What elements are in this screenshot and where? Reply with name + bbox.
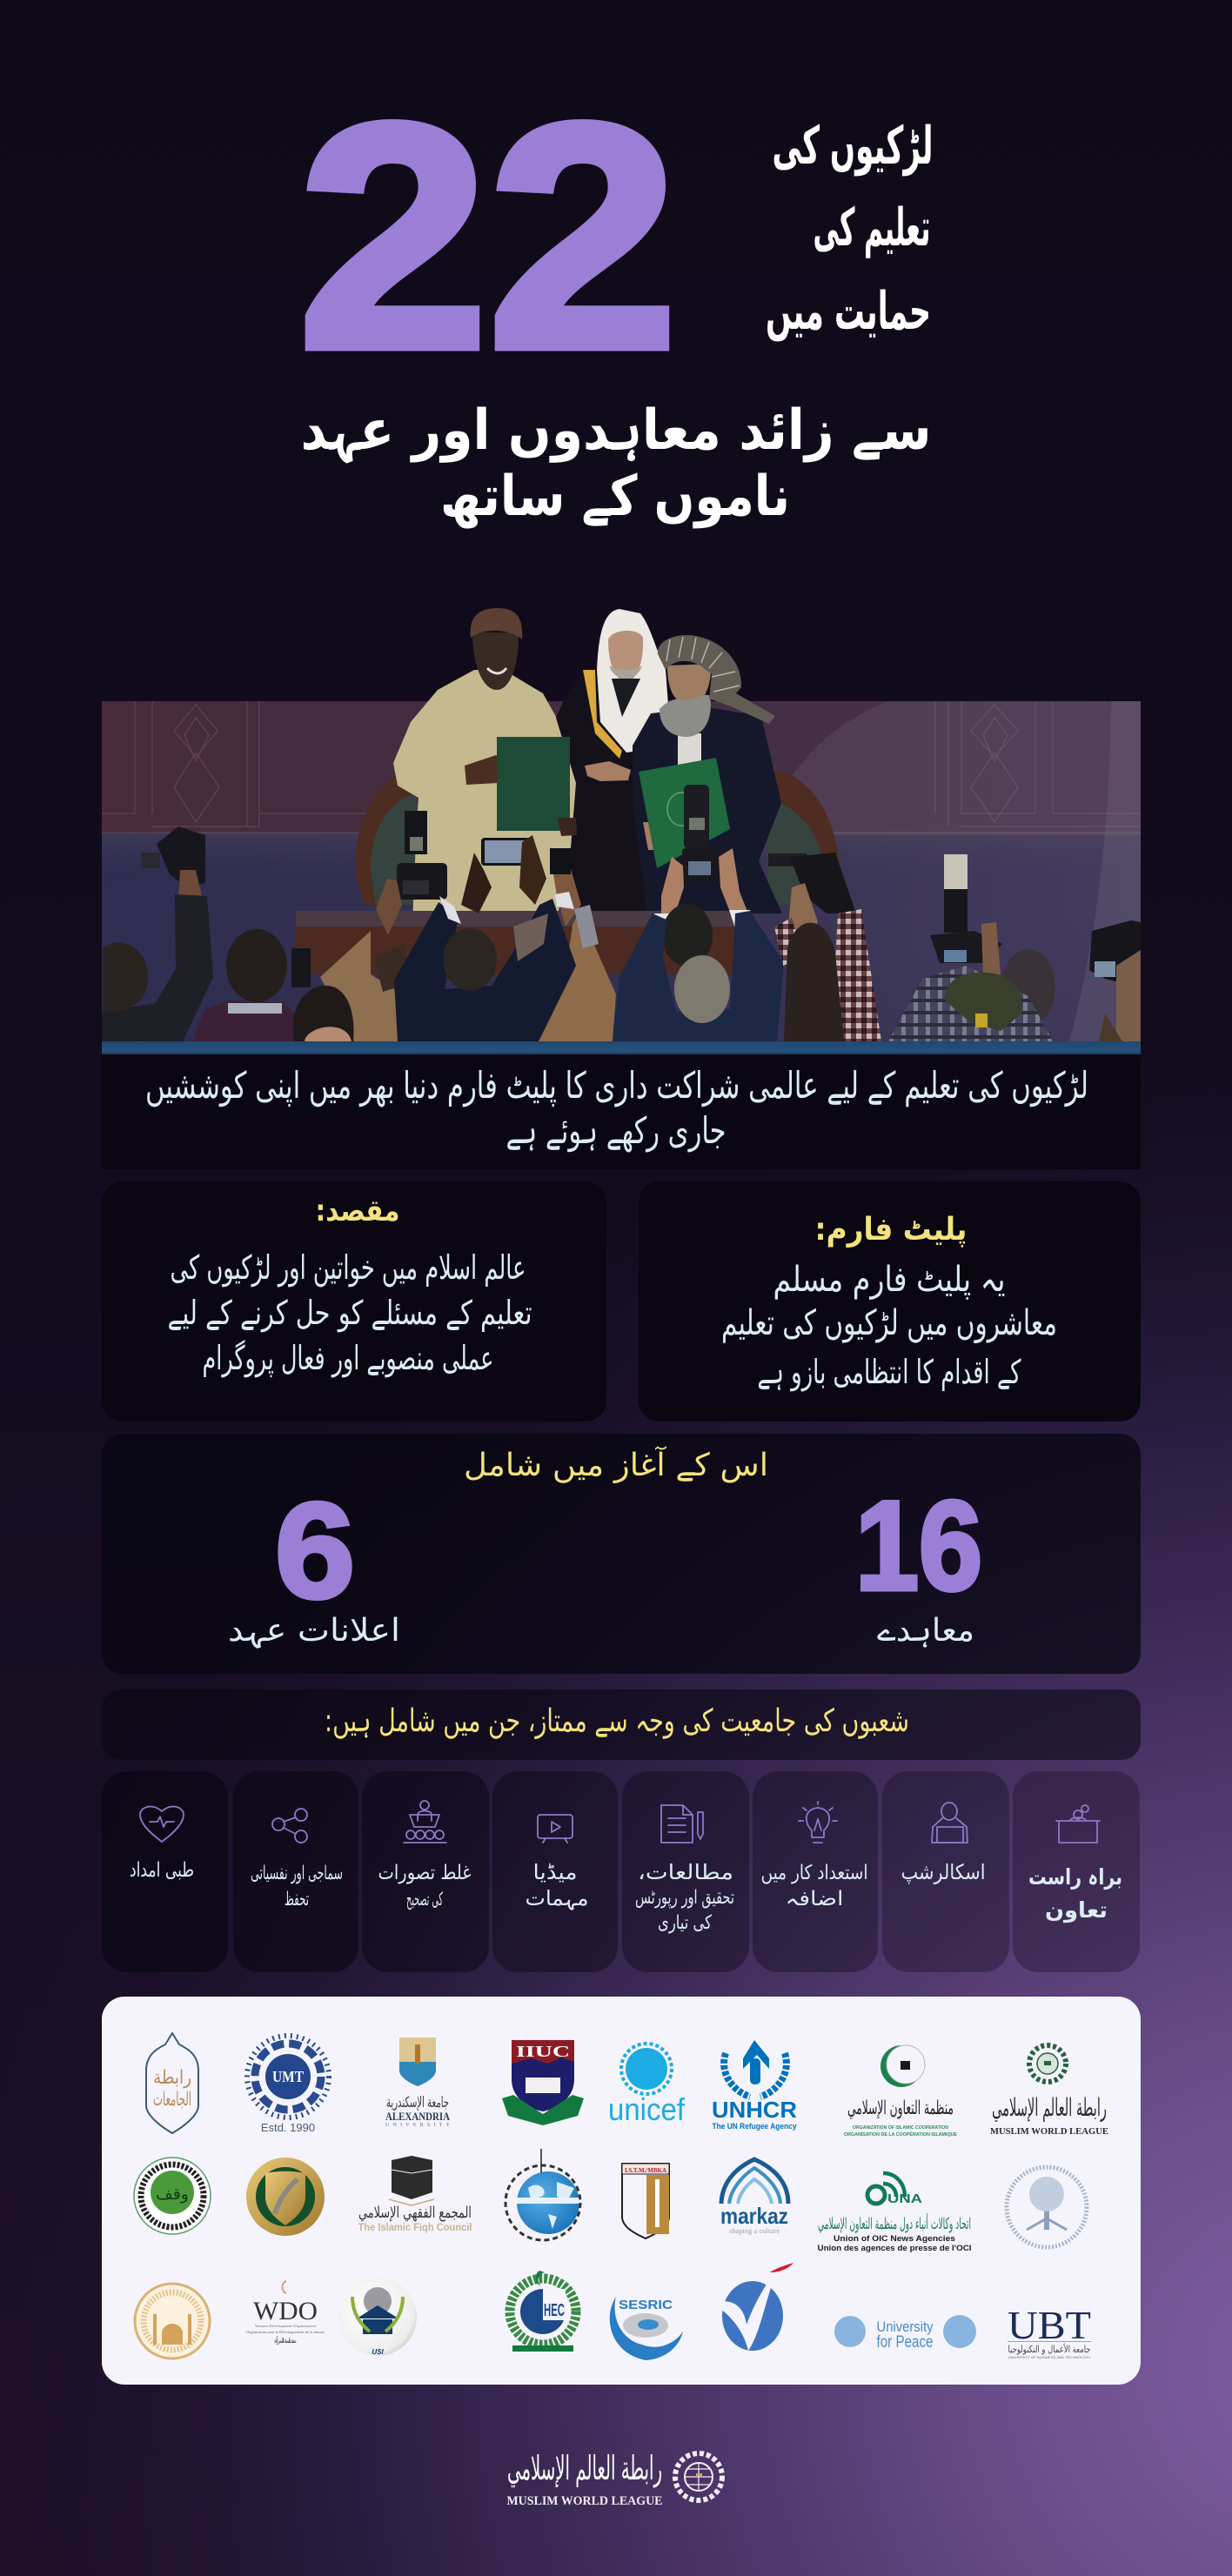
card: correcting misconceptions xyxy=(362,1771,489,1972)
card: studies and reports: مطالعات، xyxy=(638,1860,733,1884)
logo: Union of OIC News Agencies xyxy=(818,2173,971,2253)
caption panel xyxy=(102,1054,1141,1169)
card: direct cooperation: تعاون xyxy=(1045,1897,1108,1924)
logo: Union of OIC News Agencies: UNA xyxy=(887,2191,922,2206)
statistic: 6 declarations: 6 xyxy=(275,1475,355,1627)
panel: platform xyxy=(639,1181,1141,1422)
card: media campaigns xyxy=(492,1771,618,1972)
panel: sectors heading: شعبوں کی جامعیت کی وجہ سے ممتاز، جن میں شامل ہیں: xyxy=(325,1703,909,1739)
logo: HEC Pakistan xyxy=(510,2271,576,2352)
logo: HEC Pakistan: HEC xyxy=(544,2301,565,2320)
photographers crowd xyxy=(102,785,1141,1041)
left photographer xyxy=(102,894,213,1041)
emblem: globe and wreath xyxy=(675,2453,722,2500)
icon: speaker and audience xyxy=(404,1801,446,1843)
card: capacity building: اضافہ xyxy=(785,1888,844,1910)
logo: Organization of Islamic Cooperation: ORGANISATION DE LA COOPÉRATION ISLAMIQUE xyxy=(844,2131,957,2138)
icon: heart with pulse xyxy=(140,1806,184,1842)
panel: partner logos xyxy=(102,1997,1141,2385)
logo: Muslim World League xyxy=(990,2045,1108,2137)
headline subtitle xyxy=(301,398,931,529)
card: studies and reports xyxy=(622,1771,749,1972)
objective text: تعلیم کے مسئلے کو حل کرنے کے لیے xyxy=(167,1294,532,1333)
headline text beside number: لڑکیوں کی xyxy=(773,116,933,177)
card: direct cooperation: براہ راست xyxy=(1028,1864,1122,1890)
headline text beside number: حمایت میں xyxy=(766,281,931,342)
objective text xyxy=(167,1248,532,1378)
logo: universities league badge xyxy=(146,2033,198,2133)
logo: universities league badge: رابطة xyxy=(153,2067,191,2089)
logo: Islamic Fiqh Council: المجمع الفقهي الإسلامي xyxy=(358,2204,472,2222)
card: scholarship xyxy=(882,1771,1009,1972)
statistic: 16 agreements: معاہدے xyxy=(877,1613,974,1649)
logo: University for Peace: University xyxy=(877,2318,934,2335)
footer logo: Muslim World League: MUSLIM WORLD LEAGUE xyxy=(506,2494,663,2508)
objective text: عالم اسلام میں خواتین اور لڑکیوں کی xyxy=(171,1248,526,1288)
logo: I.S.T.M. shield: I.S.T.M./MBKA xyxy=(625,2167,666,2174)
card: medical aid xyxy=(102,1771,228,1972)
card: scholarship: اسکالرشپ xyxy=(901,1860,985,1884)
platform text: کے اقدام کا انتظامی بازو ہے xyxy=(757,1353,1021,1392)
logo: Markaz: shaping a culture xyxy=(729,2227,780,2235)
logo: UNICEF: unicef xyxy=(608,2091,686,2127)
logo: Markaz: markaz xyxy=(720,2203,788,2229)
headline text beside number xyxy=(766,116,933,342)
photo bottom strip xyxy=(102,1041,1141,1054)
logo: Muslim World League: رابطة العالم الإسلامي xyxy=(992,2093,1107,2122)
logo: WDO: WDO xyxy=(253,2297,318,2325)
footer logo: Muslim World League: رابطة العالم الإسلامي xyxy=(507,2449,662,2488)
crowd member in maroon sweater xyxy=(193,929,311,1041)
photographers at right xyxy=(888,949,1141,1041)
crowd member in plaid shirt xyxy=(774,909,881,1041)
logo: IIUC xyxy=(502,2040,584,2125)
logo: Islamic Call Society globe xyxy=(506,2149,580,2240)
logo: UBT: UNIVERSITY OF BUSINESS AND TECHNOLOGY xyxy=(1008,2355,1091,2359)
icon: light bulb xyxy=(799,1802,837,1843)
icon: media screen xyxy=(538,1815,572,1843)
raised cameras and phones xyxy=(141,785,1141,987)
logo: blue swoosh with red feather xyxy=(713,2263,793,2351)
card: media campaigns: مہمات xyxy=(526,1886,588,1910)
icon: scholar at laptop xyxy=(932,1803,968,1843)
logo: Islamic Fiqh Academy seal: وقف xyxy=(156,2185,189,2204)
crowd member in tan jacket xyxy=(293,931,409,1041)
footer logo: Muslim World League xyxy=(506,2449,722,2508)
logo: Al Qasimia University xyxy=(135,2284,210,2359)
card: studies and reports: کی تیاری xyxy=(658,1912,712,1934)
logo: gold shield medal xyxy=(246,2158,325,2236)
logo: UNHCR: UNHCR xyxy=(712,2097,797,2123)
headline text beside number: تعلیم کی xyxy=(813,197,931,258)
platform text: معاشروں میں لڑکیوں کی تعلیم xyxy=(721,1303,1057,1343)
logo: SESRIC xyxy=(610,2297,683,2360)
logo: USI xyxy=(338,2278,417,2356)
logo: Organization of Islamic Cooperation: ORGANIZATION OF ISLAMIC COOPERATION xyxy=(853,2125,948,2131)
icon: document and pen xyxy=(661,1805,703,1843)
panel: initiative statistics xyxy=(102,1434,1141,1674)
platform heading: پلیٹ فارم: xyxy=(814,1212,968,1248)
logo: UMT: Estd. 1990 xyxy=(261,2121,315,2134)
man in beige robe xyxy=(393,608,576,922)
statistics heading: اس کے آغاز میں شامل xyxy=(464,1445,768,1483)
card: social and psychological protection: تحفظ xyxy=(285,1889,309,1910)
headline subtitle: سے زائد معاہدوں اور عہد xyxy=(301,398,931,464)
logo: Union of OIC News Agencies: اتحاد وكالات أنباء دول منظمة التعاون الإسلامي xyxy=(818,2213,971,2233)
logo: Muslim World League: MUSLIM WORLD LEAGUE xyxy=(990,2126,1108,2137)
logo: USI: USI xyxy=(372,2348,384,2356)
card: social and psychological protection: سماجی اور نفسیاتی xyxy=(251,1863,343,1884)
logo: SESRIC: SESRIC xyxy=(619,2298,673,2312)
logo: UBT: جامعة الأعمال و التكنولوجيا xyxy=(1008,2343,1091,2355)
statistic: 6 declarations: اعلانات عہد xyxy=(228,1613,400,1649)
photo background: wall and floor xyxy=(102,701,1141,1041)
logo: Organization of Islamic Cooperation xyxy=(844,2045,957,2138)
card: correcting misconceptions: غلط تصورات xyxy=(378,1862,472,1884)
logo: Union of OIC News Agencies: Union of OIC News Agencies xyxy=(834,2234,955,2244)
caption panel: جاری رکھے ہوئے ہے xyxy=(506,1109,726,1153)
logo: Mohamed bin Zayed University seal xyxy=(1007,2167,1087,2247)
logo: Alexandria University: جامعة الإسكندرية xyxy=(386,2094,449,2111)
card: medical aid: طبی امداد xyxy=(130,1859,194,1882)
objective text: عملی منصوبے اور فعال پروگرام xyxy=(202,1339,494,1378)
logo: UMT xyxy=(247,2036,329,2134)
panel: objective xyxy=(102,1181,606,1422)
card: studies and reports: تحقیق اور رپورٹس xyxy=(635,1887,734,1909)
platform text xyxy=(721,1260,1057,1392)
statistic: 6 declarations xyxy=(228,1475,400,1649)
logo: IIUC: IIUC xyxy=(516,2043,570,2060)
logo: Alexandria University: UNIVERSITY xyxy=(385,2123,451,2128)
logo: Alexandria University xyxy=(385,2037,451,2128)
statistic: 16 agreements: 16 xyxy=(855,1475,982,1616)
card: correcting misconceptions: کی تصحیح xyxy=(406,1889,443,1910)
logo: University for Peace: for Peace xyxy=(877,2333,933,2352)
logo: Islamic Fiqh Academy seal xyxy=(134,2158,211,2234)
icon: podium xyxy=(1056,1805,1100,1843)
headline number 22: 22 xyxy=(298,58,678,414)
logo: I.S.T.M. shield xyxy=(622,2164,669,2238)
logo: Union of OIC News Agencies: Union des agences de presse de l'OCI xyxy=(818,2244,971,2253)
card: media campaigns: میڈیا xyxy=(532,1860,578,1884)
icon: share network xyxy=(272,1809,307,1843)
logo: UMT: UMT xyxy=(272,2068,304,2085)
logo: UNHCR: The UN Refugee Agency xyxy=(712,2122,797,2131)
logo: WDO: Organisation pour le Développement de la femme xyxy=(246,2330,325,2334)
photo: signing ceremony with photographers xyxy=(102,608,1141,1054)
panel: sectors heading xyxy=(102,1689,1141,1760)
logo: Organization of Islamic Cooperation: منظمة التعاون الإسلامي xyxy=(847,2098,954,2119)
logo: WDO: منظمة المرأة xyxy=(274,2336,297,2345)
crowd members in navy suits xyxy=(394,892,784,1041)
card: social and psychological protection xyxy=(233,1771,358,1972)
logo: WDO: Women Development Organization xyxy=(255,2324,317,2328)
chairs xyxy=(355,608,839,922)
logo: WDO xyxy=(246,2281,325,2345)
card: capacity building xyxy=(753,1771,878,1972)
headline subtitle: ناموں کے ساتھ xyxy=(440,465,790,529)
logo: Islamic Fiqh Council xyxy=(358,2156,472,2233)
logo: University for Peace xyxy=(834,2315,976,2352)
platform text: یہ پلیٹ فارم مسلم xyxy=(773,1260,1006,1300)
logo: Islamic Fiqh Council: The Islamic Fiqh Council xyxy=(358,2223,472,2233)
logo: Markaz xyxy=(720,2159,788,2235)
logo: universities league badge: الجامعات xyxy=(153,2089,191,2111)
logo: Alexandria University: ALEXANDRIA xyxy=(385,2111,450,2123)
sector cards xyxy=(102,1771,1140,1972)
objective heading: مقصد: xyxy=(315,1194,400,1228)
man in striped turban xyxy=(633,635,782,913)
logo: UNHCR xyxy=(712,2040,797,2131)
green folders xyxy=(497,737,730,868)
card: direct cooperation xyxy=(1013,1771,1140,1972)
logo: UNICEF xyxy=(608,2044,686,2127)
desk xyxy=(296,911,747,974)
logo: UBT: UBT xyxy=(1008,2303,1091,2347)
card: capacity building: استعداد کار میں xyxy=(760,1862,868,1884)
man in black cloak and white headscarf xyxy=(556,609,668,913)
